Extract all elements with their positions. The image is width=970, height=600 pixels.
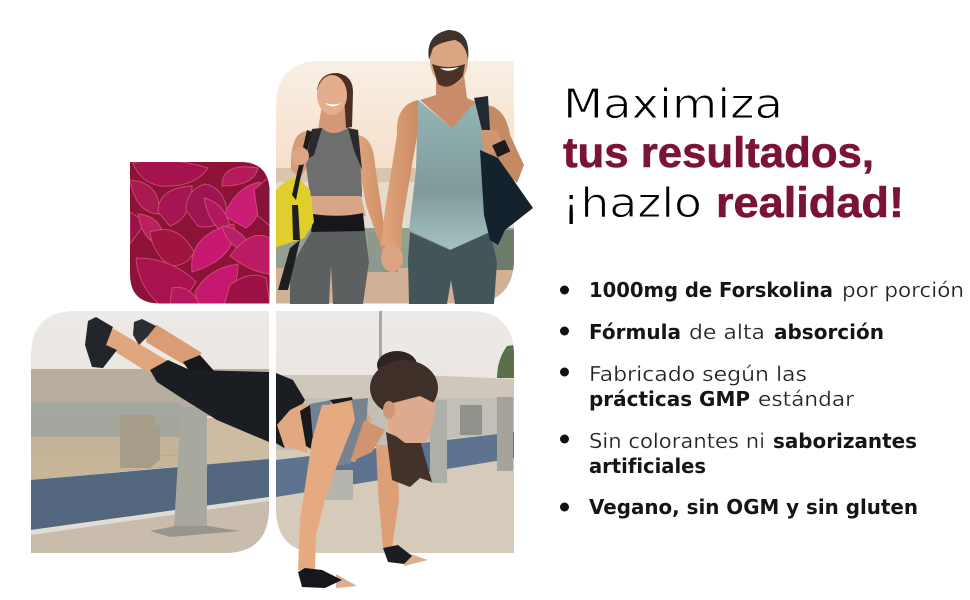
waistband (311, 213, 365, 234)
leggings (290, 231, 369, 304)
photo: woman with yellow bag (276, 73, 392, 304)
panel: plank photo left half (31, 311, 269, 553)
post (174, 407, 207, 528)
bullet: fórmula: de alta (689, 320, 765, 344)
rail bracket right (460, 405, 482, 435)
bullet: sin colorantes (560, 429, 917, 478)
bra band (300, 405, 316, 452)
bullet: fórmula (560, 320, 884, 344)
second leg (146, 325, 202, 366)
lamp pole (379, 311, 382, 359)
back (300, 398, 372, 462)
ground (276, 450, 514, 554)
posts (430, 400, 447, 483)
bullet: fórmula: absorción (774, 320, 884, 344)
near hand fingers (336, 574, 357, 588)
title: realidad! (716, 179, 904, 227)
barrier (276, 375, 514, 398)
first leg (103, 329, 168, 375)
far hand glove (383, 545, 412, 564)
backpack (474, 96, 490, 130)
crop top (306, 128, 362, 197)
bullet: GMP: Fabricado según las (589, 362, 807, 386)
tank top (409, 100, 488, 250)
yellow bag (276, 178, 314, 247)
road (31, 459, 269, 530)
hair (428, 30, 468, 60)
near arm (298, 403, 355, 570)
long hair (386, 432, 432, 487)
face (430, 34, 468, 86)
photo: man with backpack (381, 30, 533, 304)
bullet: vegano: Vegano, sin OGM y sin gluten (589, 495, 918, 519)
far arm (376, 445, 399, 548)
bullet: 1000mg (560, 278, 964, 302)
neck (318, 105, 350, 142)
leggings (150, 360, 269, 442)
far hand fingers (404, 552, 428, 566)
hand on strap (291, 147, 309, 165)
face (317, 75, 347, 115)
arms (381, 100, 420, 248)
waist (277, 403, 308, 453)
rail bracket (120, 415, 160, 468)
chest (350, 420, 385, 462)
hair (317, 73, 353, 128)
tree (497, 345, 514, 378)
bullet: GMP: estándar (758, 387, 855, 411)
panel: coleus leaves photo (130, 160, 270, 305)
bullet: sin colorantes: saborizantes (773, 429, 917, 453)
bullet: 1000mg: 1000mg de Forskolina (589, 278, 833, 302)
skin of arms (291, 131, 318, 178)
photo: woman doing plank (276, 351, 438, 588)
bullet: GMP (560, 362, 855, 411)
neck and chest (420, 75, 480, 130)
road (276, 432, 514, 497)
bullet: sin colorantes: Sin colorantes ni (589, 429, 765, 453)
bullet: fórmula: Fórmula (589, 320, 681, 344)
title (562, 80, 904, 227)
panel: couple photo background (276, 61, 514, 304)
near glove (298, 568, 342, 588)
face (388, 396, 436, 443)
bullet list (560, 278, 964, 519)
bullet: GMP: prácticas GMP (589, 387, 750, 411)
bun (377, 351, 417, 379)
concrete barrier (31, 369, 269, 420)
midriff (311, 196, 366, 216)
bullet: sin colorantes: artificiales (589, 454, 706, 478)
hands (381, 244, 403, 272)
hair (370, 360, 438, 416)
top strap (334, 398, 368, 466)
title: tus resultados, (563, 129, 874, 177)
shoes (85, 317, 117, 368)
title: ¡hazlo (562, 179, 702, 227)
guard rail (32, 414, 180, 480)
panel: plank photo right half (276, 311, 514, 554)
bullet: 1000mg: por porción (842, 278, 964, 302)
title: Maximiza (563, 80, 783, 128)
ground (31, 497, 269, 553)
hips (276, 373, 305, 448)
shorts (408, 232, 497, 304)
